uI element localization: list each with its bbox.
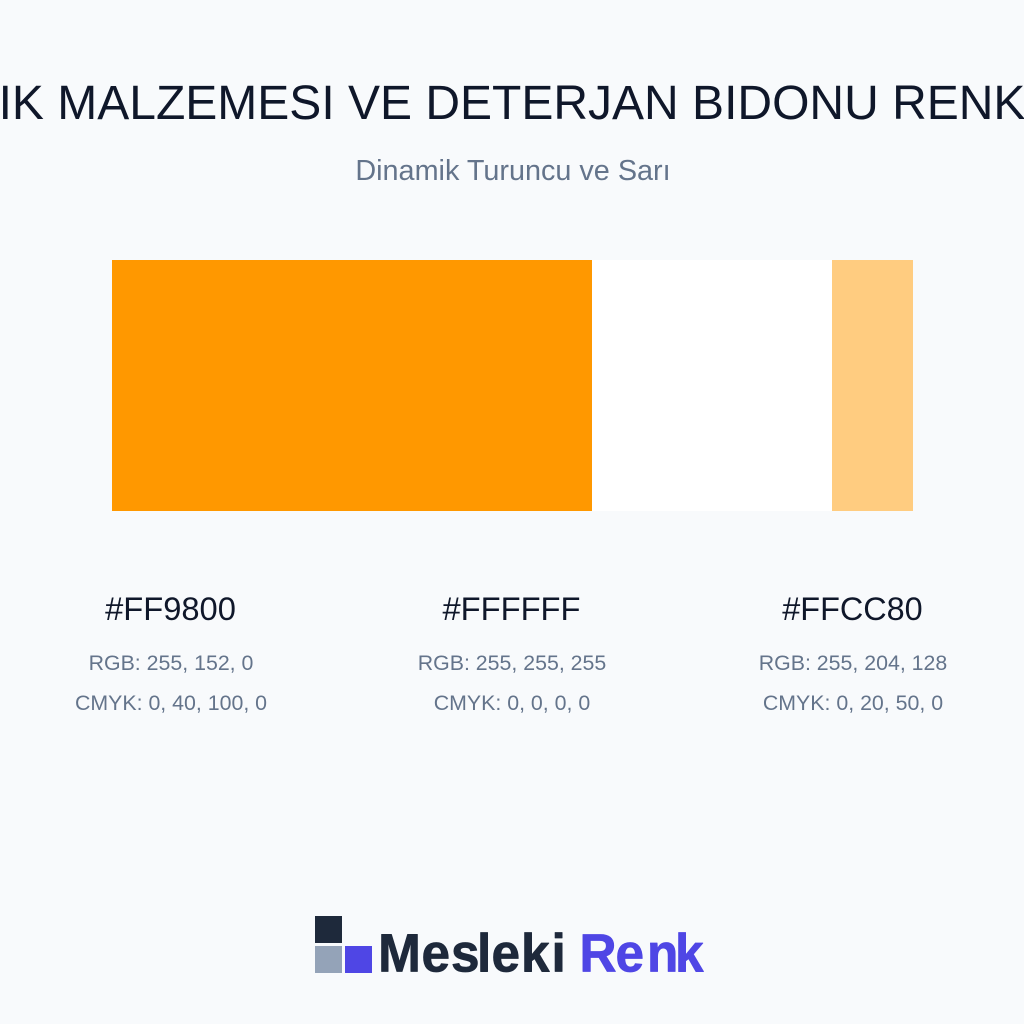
- subtitle: Dinamik Turuncu ve Sarı: [355, 155, 671, 187]
- color info: light orange: #FFCC80: [782, 591, 923, 627]
- color info: orange: RGB: 255, 152, 0: [89, 651, 254, 675]
- swatch: orange: [112, 260, 592, 511]
- color info: white: RGB: 255, 255, 255: [418, 651, 606, 675]
- swatch: light orange: [832, 260, 913, 511]
- logo wordmark: Mesleki: [378, 924, 566, 984]
- logo wordmark: Renk: [580, 924, 704, 984]
- color info: white: [418, 590, 606, 715]
- color info: light orange: [759, 591, 947, 715]
- color info: light orange: RGB: 255, 204, 128: [759, 651, 947, 675]
- color info: white: #FFFFFF: [443, 590, 580, 627]
- color info: orange: CMYK: 0, 40, 100, 0: [75, 691, 267, 715]
- color palette bar: [112, 260, 913, 511]
- color info: orange: #FF9800: [105, 590, 236, 627]
- logo: [315, 916, 704, 984]
- color info: light orange: CMYK: 0, 20, 50, 0: [763, 691, 943, 715]
- color info: orange: [75, 590, 267, 715]
- logo icon: [315, 916, 372, 973]
- logo wordmark: [378, 924, 704, 984]
- swatch: white: [592, 260, 832, 511]
- color info: white: CMYK: 0, 0, 0, 0: [434, 691, 590, 715]
- title: IK MALZEMESI VE DETERJAN BIDONU RENK: [0, 77, 1024, 130]
